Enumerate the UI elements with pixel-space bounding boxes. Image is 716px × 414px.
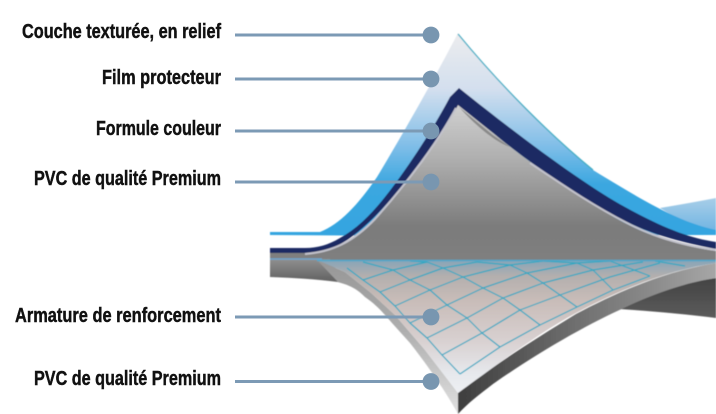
back film fold bbox=[660, 198, 716, 232]
callout: Couche texturée, en relief bbox=[22, 21, 439, 43]
callout: Armature de renforcement bbox=[15, 305, 439, 327]
callout: Film protecteur: Film protecteur bbox=[102, 67, 221, 89]
right shadow of lower sheet bbox=[619, 278, 716, 318]
layer: premium PVC top sheet bbox=[270, 105, 716, 263]
blue line on left band bbox=[270, 258, 322, 260]
layer: teal top edge bbox=[458, 34, 593, 170]
blue fringe along the crease bbox=[317, 260, 716, 262]
callout: Formule couleur: Formule couleur bbox=[96, 118, 221, 140]
darker shading under the navy edge bbox=[459, 107, 510, 147]
bottom sheet bevel bbox=[317, 260, 458, 414]
callout: Formule couleur bbox=[96, 118, 439, 140]
bottom sheet top face bbox=[317, 260, 716, 393]
layer: textured film bbox=[270, 33, 716, 236]
callout: PVC de qualité Premium (upper) bbox=[34, 168, 439, 190]
layered material illustration bbox=[270, 33, 716, 414]
callout: PVC de qualité Premium (lower) bbox=[34, 368, 439, 390]
bottom sheet thickness bbox=[458, 263, 716, 414]
callout: PVC de qualité Premium (upper): PVC de qualité Premium bbox=[34, 168, 221, 190]
callout: Film protecteur bbox=[102, 67, 439, 89]
callout: PVC de qualité Premium (lower): PVC de qualité Premium bbox=[34, 368, 221, 390]
callout: Couche texturée, en relief: Couche texturée, en relief bbox=[22, 21, 221, 43]
callout: Armature de renforcement: Armature de renforcement bbox=[15, 305, 221, 327]
layer: navy colour formula bbox=[270, 88, 716, 253]
reinforcement mesh bbox=[347, 261, 685, 374]
left band of lower sheet bbox=[270, 259, 345, 284]
light edge of the sheet bbox=[305, 108, 716, 254]
